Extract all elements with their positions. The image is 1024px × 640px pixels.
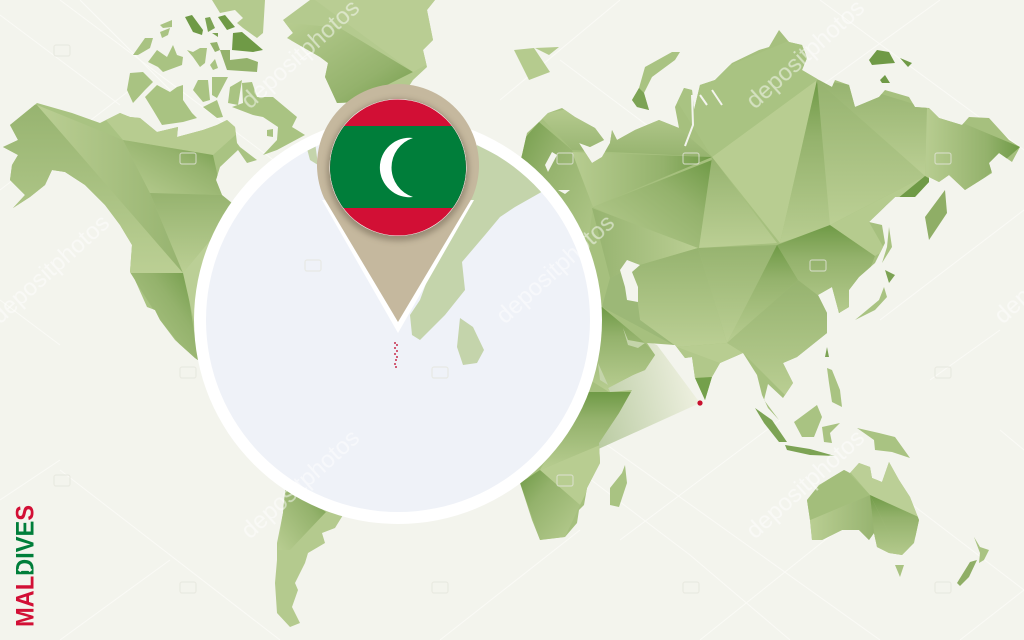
highlight fan from Maldives dot to circle [530, 300, 700, 480]
location pin with flag [317, 84, 479, 333]
title: MALDIVES: MALDIVES [12, 505, 40, 627]
Arctic and Pacific islands [514, 47, 989, 586]
North America [3, 103, 257, 360]
Maldives location dot [697, 400, 703, 406]
India and Sri Lanka inside circle [306, 142, 545, 365]
depositphotos watermark text: depositphotos [491, 209, 620, 329]
Canadian Arctic islands [127, 0, 305, 155]
Greenland [283, 0, 435, 103]
Eurasia and Africa [520, 30, 1020, 540]
Australia [807, 462, 919, 555]
zoomed map circle [194, 116, 602, 524]
flag of Maldives [330, 96, 466, 240]
depositphotos watermark text: depositphotos [236, 424, 365, 544]
Maldives atoll dots [394, 342, 398, 368]
South America [275, 490, 342, 627]
depositphotos watermark text: depositphotos [741, 424, 870, 544]
inland seas and bays [545, 90, 722, 385]
